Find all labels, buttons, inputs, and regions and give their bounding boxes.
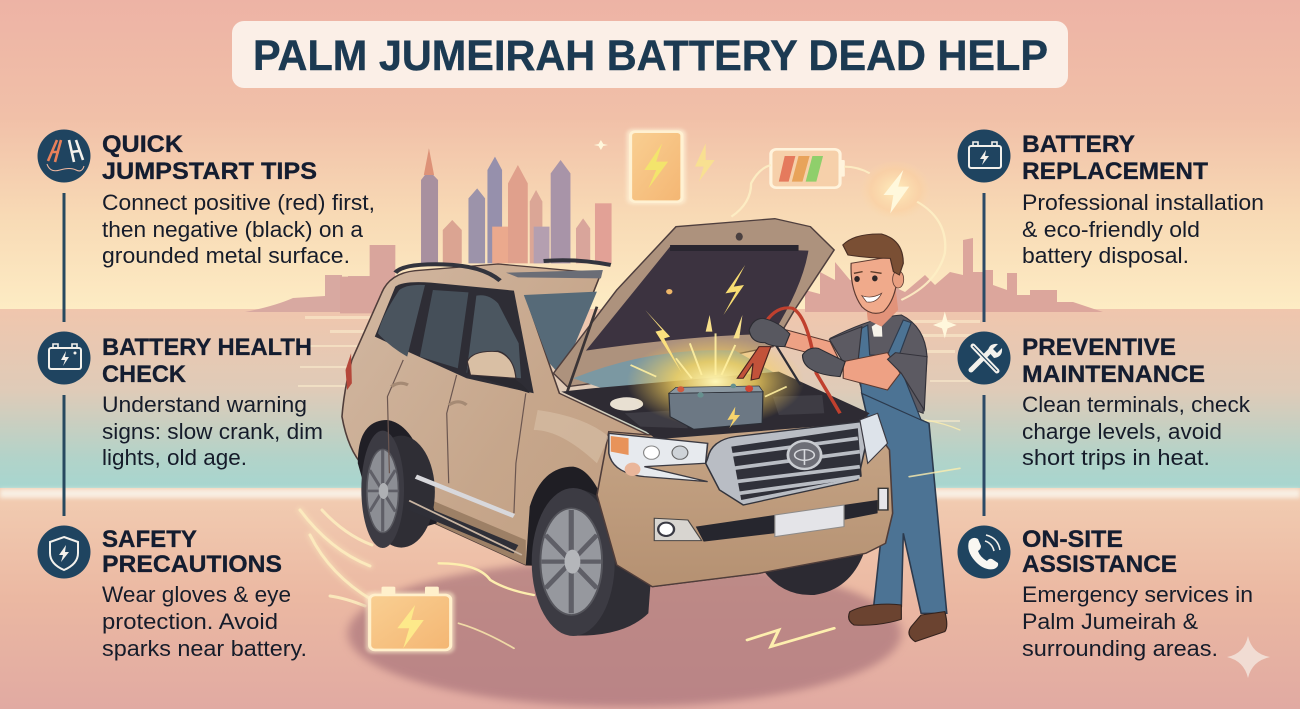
energy arcs around icons [731,165,945,300]
heading: PRECAUTIONS [102,551,282,578]
mechanic body and legs [830,315,947,642]
car body shell [342,264,893,587]
icon: battery [958,130,1010,182]
icon: glowing battery bottom [366,587,455,653]
heading [1022,526,1177,578]
mechanic arms, gloves and jumper cables [737,308,927,413]
heading [102,131,317,185]
decorative energy swirl around the rear of the car [300,510,372,606]
far front tyre [763,553,864,595]
heading: BATTERY HEALTH [102,334,312,361]
heading: MAINTENANCE [1022,361,1205,388]
tail light [346,353,352,390]
body text [102,582,307,661]
heading: ASSISTANCE [1022,551,1177,578]
icon: glowing battery top [627,129,686,204]
glow behind battery [627,337,804,427]
heading: SAFETY [102,526,197,553]
heading: BATTERY [1022,131,1135,158]
front fascia [597,417,893,587]
title banner [232,21,1068,88]
body text: & eco-friendly old [1022,217,1200,242]
icon: battery [38,332,90,384]
distant city skyline [245,148,1103,313]
body text: Clean terminals, check [1022,392,1251,417]
headlight [609,433,708,482]
right column connectors [982,193,986,516]
body text: Understand warning [102,392,307,417]
heading [1022,131,1208,185]
door lines, handles and trim [387,360,526,555]
body text: Professional installation [1022,190,1264,215]
body text: Emergency services in [1022,582,1253,607]
panel: safety precautions [38,526,307,661]
open hood [553,219,834,392]
body text: battery disposal. [1022,243,1189,268]
body text: protection. Avoid [102,609,278,634]
body text: surrounding areas. [1022,636,1218,661]
panel: on-site assistance [958,526,1253,661]
mechanic head [843,234,904,327]
body text [1022,190,1264,268]
windshield under the hood [573,350,799,393]
heading: CHECK [102,361,186,388]
heading: JUMPSTART TIPS [102,158,317,185]
fender highlight [534,410,609,463]
lower bumper, plate and fog lamp [654,488,888,542]
panel: battery health check [38,332,323,470]
panel: quick jumpstart tips [38,130,375,268]
body text: sparks near battery. [102,636,307,661]
icon: glowing bolt [860,160,931,220]
icon: sparkles [594,140,957,338]
side mirror [467,351,530,393]
heading [102,334,312,388]
body text [102,392,323,470]
icon: shield [38,526,90,578]
body text: charge levels, avoid [1022,419,1222,444]
body text: Wear gloves & eye [102,582,291,607]
heading: REPLACEMENT [1022,158,1208,185]
body text: Palm Jumeirah & [1022,609,1198,634]
energy swirls [439,420,960,648]
body text [1022,392,1251,470]
heading: QUICK [102,131,183,158]
icon: charge level battery [771,149,845,188]
heading: ON-SITE [1022,526,1123,553]
body text [102,190,375,268]
sill shading [415,493,526,565]
grille with emblem [706,413,887,505]
sparks over battery [631,265,787,397]
body text: Connect positive (red) first, [102,190,375,215]
illustration: SUV with mechanic jumpstarting the battery [342,129,960,707]
panel: battery replacement [958,130,1264,268]
heading [102,526,282,578]
body text: then negative (black) on a [102,217,364,242]
heading: PREVENTIVE [1022,334,1176,361]
body text [1022,582,1253,661]
icon: small lightning [695,143,715,182]
icon: jumper clamps [38,130,90,182]
window frames and glass [375,282,597,393]
ground shadow [348,560,901,707]
icon: wrench and screwdriver [958,332,1010,384]
body text: signs: slow crank, dim [102,419,323,444]
body text: lights, old age. [102,445,247,470]
icon: corner sparkle [1227,636,1270,678]
engine bay [561,372,870,439]
battery [669,384,763,429]
body text: short trips in heat. [1022,445,1210,470]
title banner: PALM JUMEIRAH BATTERY DEAD HELP [253,33,1048,80]
front wheel arch and tyre [526,467,650,636]
roof rails and sunroof [395,260,611,281]
icon: phone [958,526,1010,578]
body text: grounded metal surface. [102,243,350,268]
heading [1022,334,1205,388]
rear wheel arch and tyre [358,420,437,548]
panel: preventive maintenance [958,332,1251,470]
left column connectors [62,193,66,516]
